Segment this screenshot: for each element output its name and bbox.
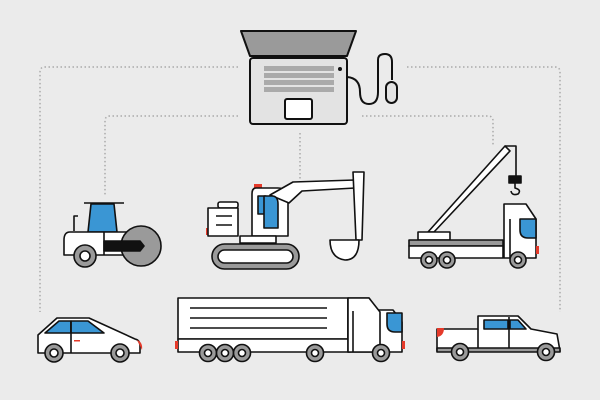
icon: crane truck: [409, 146, 539, 268]
icon: excavator: [206, 172, 364, 269]
icon: road roller: [64, 203, 161, 267]
icon: car: [38, 318, 142, 362]
icon: semi truck: [175, 298, 405, 362]
icon: laptop: [241, 31, 397, 124]
icon: pickup truck: [437, 316, 560, 360]
